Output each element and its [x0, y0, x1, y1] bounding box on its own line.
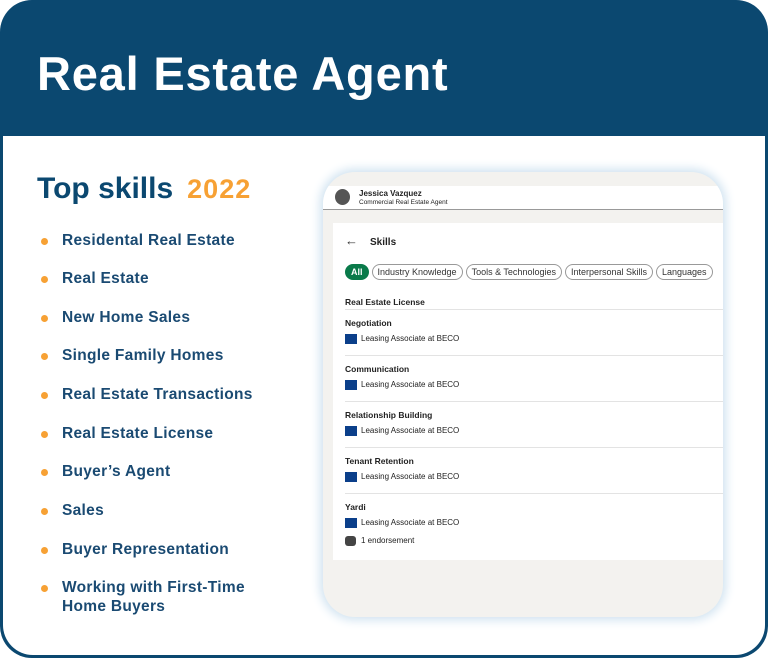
skills card: Industry Knowledge: [378, 267, 457, 277]
skills list: New Home Sales: [62, 309, 190, 326]
skills list: Real Estate: [62, 270, 149, 287]
skills card: Languages: [662, 267, 707, 277]
skills card: Negotiation: [345, 318, 392, 328]
heading: top skills: Top skills 2022: [37, 172, 251, 205]
skills card: Leasing Associate at BECO: [361, 472, 459, 481]
skills card: Tenant Retention: [345, 456, 414, 466]
skills list: Working with First-Time: [62, 579, 245, 596]
skills card: ←: [345, 233, 358, 248]
skills card: Tools & Technologies: [472, 267, 556, 277]
profile bar: Jessica Vazquez: [359, 189, 422, 198]
skills list: Real Estate License: [62, 425, 213, 442]
skills card: All: [351, 267, 363, 277]
profile bar: [323, 186, 723, 210]
skills card: Interpersonal Skills: [571, 267, 647, 277]
skills card: Relationship Building: [345, 410, 432, 420]
skills card: Leasing Associate at BECO: [361, 380, 459, 389]
skills list: Buyer’s Agent: [62, 463, 170, 480]
skills list: Residental Real Estate: [62, 232, 235, 249]
skills list: Buyer Representation: [62, 541, 229, 558]
skills card: Real Estate License: [345, 297, 425, 307]
skills card: Leasing Associate at BECO: [361, 334, 459, 343]
skills card: Skills: [370, 237, 396, 248]
skills card: 1 endorsement: [361, 536, 414, 545]
skills list: Real Estate Transactions: [62, 386, 253, 403]
skills card: Yardi: [345, 502, 366, 512]
skills list: Home Buyers: [62, 598, 165, 615]
skills card: Leasing Associate at BECO: [361, 518, 459, 527]
skills list: Sales: [62, 502, 104, 519]
profile bar: Commercial Real Estate Agent: [359, 199, 448, 206]
skills card: Communication: [345, 364, 409, 374]
skills card: Leasing Associate at BECO: [361, 426, 459, 435]
title: Real Estate Agent: [37, 47, 448, 100]
skills card: [333, 223, 723, 560]
phone screenshot: [323, 172, 723, 617]
skills list: Single Family Homes: [62, 347, 224, 364]
skills list: [41, 232, 253, 615]
body panel: [3, 136, 765, 655]
